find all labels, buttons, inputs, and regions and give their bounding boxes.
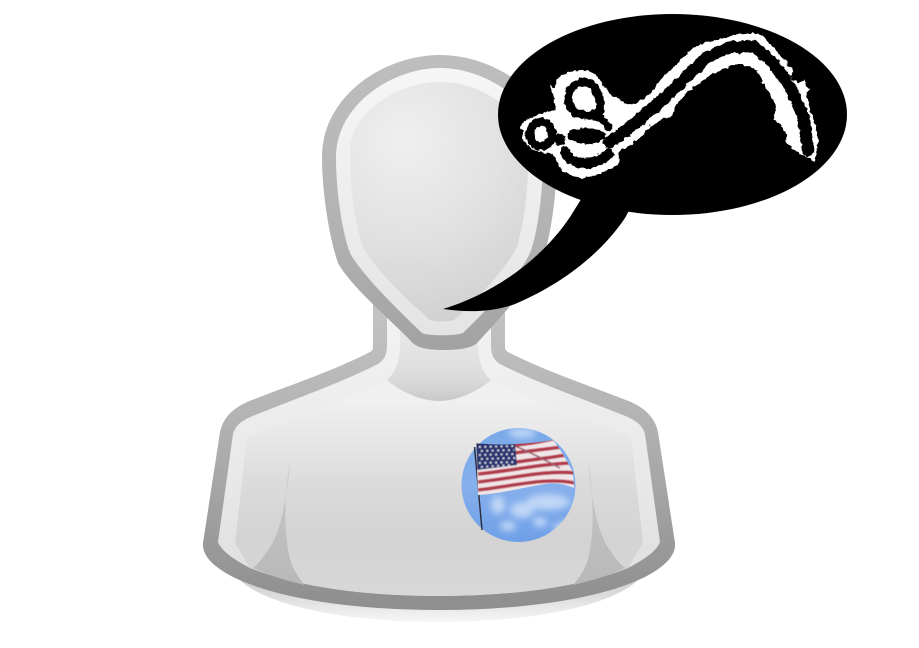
- head inner shading: [350, 82, 528, 322]
- person figure: [203, 55, 675, 622]
- ground shadow: [238, 578, 640, 622]
- infographic illustration: [202, 14, 847, 622]
- flag canton: [476, 443, 517, 470]
- head outline: [322, 55, 557, 350]
- badge clouds: [491, 428, 577, 534]
- virus white body: [520, 33, 818, 178]
- icon: ebola virus: [520, 33, 818, 178]
- right shirt fold: [573, 460, 625, 585]
- badge sky: [462, 428, 576, 542]
- neck: [387, 330, 491, 401]
- flag pole: [474, 447, 482, 530]
- upper ring tail: [590, 116, 608, 127]
- body outline: [203, 300, 675, 610]
- american flag: [476, 440, 574, 495]
- virus filament: [609, 46, 808, 150]
- left shirt fold: [253, 460, 305, 585]
- body inner shading: [235, 380, 643, 596]
- upper ring: [568, 82, 600, 115]
- flag fold: [515, 446, 560, 468]
- bubble ellipse: [498, 14, 847, 215]
- lower curve: [565, 152, 608, 163]
- head: [322, 55, 557, 350]
- body: [203, 300, 675, 610]
- lower ring: [530, 122, 552, 146]
- virus segments: [554, 128, 606, 145]
- flag stripes: [478, 438, 575, 498]
- speech bubble: [443, 14, 847, 311]
- flag stars: [479, 446, 516, 467]
- body light inner: [218, 310, 660, 596]
- bubble tail: [443, 185, 640, 311]
- head light inner: [336, 68, 543, 335]
- flag badge: [462, 428, 580, 542]
